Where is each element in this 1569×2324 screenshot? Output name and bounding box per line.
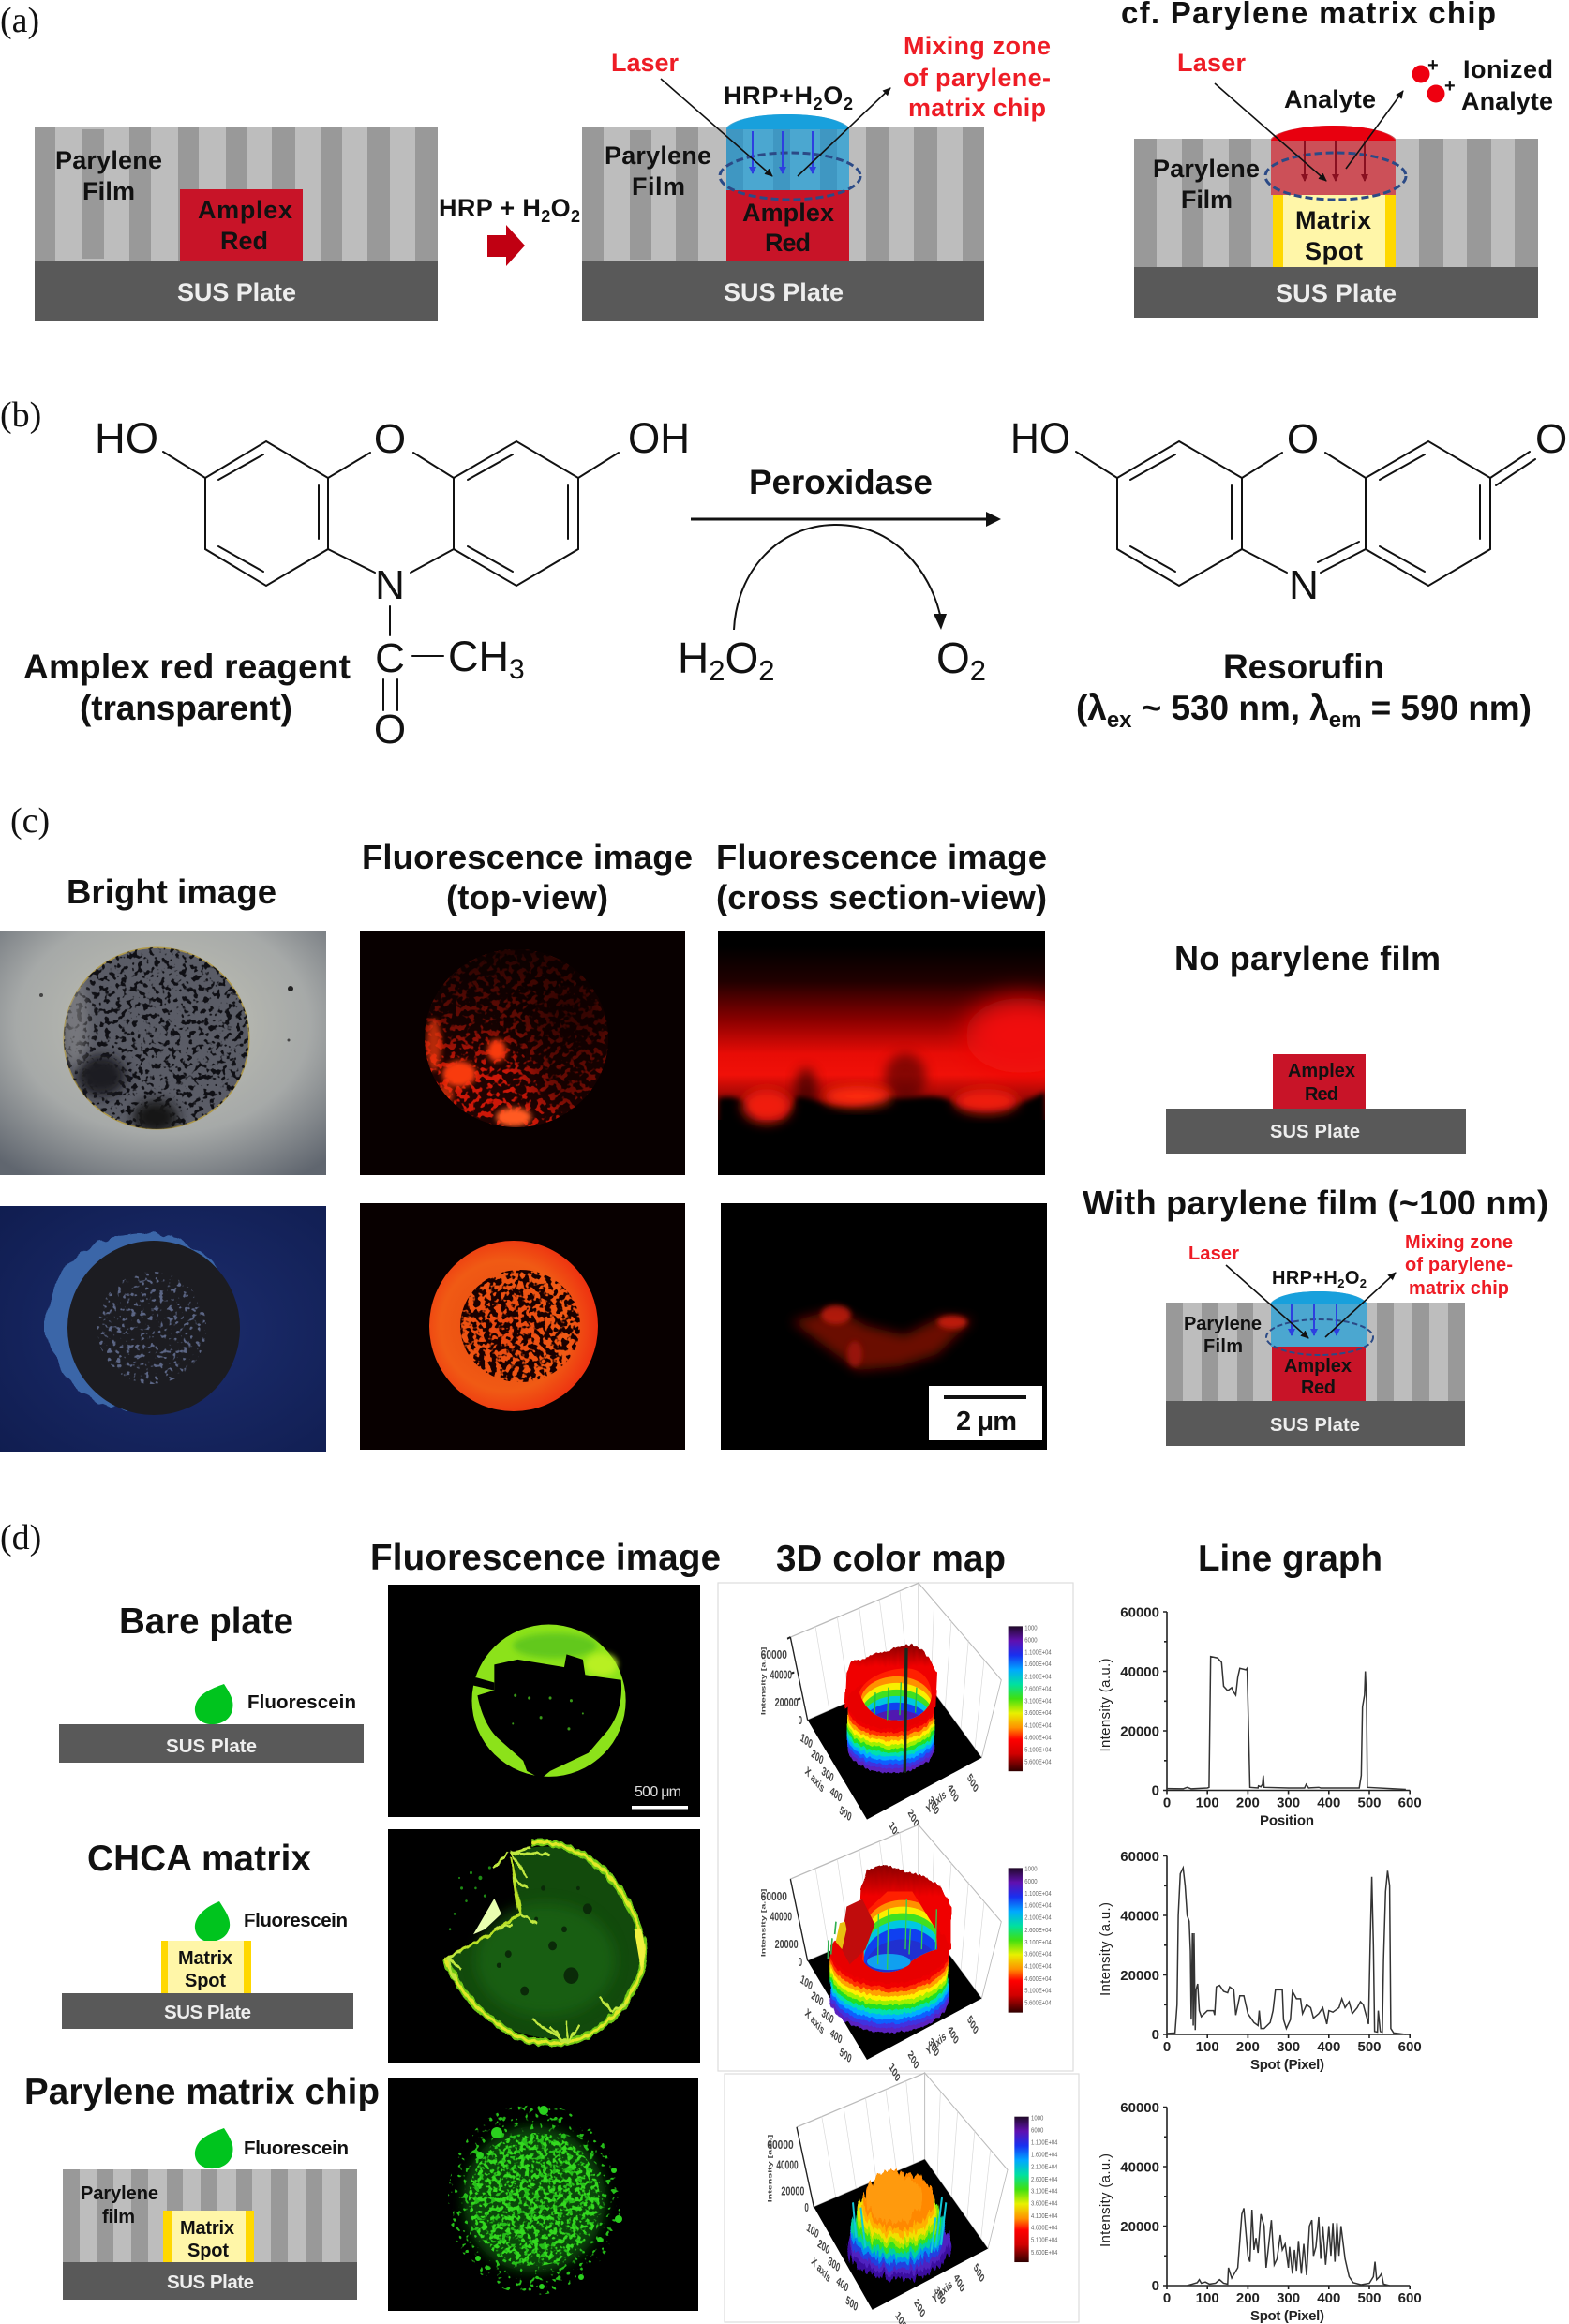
color bar: 6000: [1024, 1879, 1038, 1885]
chart: 3D color map, parylene matrix chip: 20000: [781, 2184, 804, 2198]
panel label (a): (a): [0, 1, 39, 40]
color bar: 1.600E+04: [1031, 2153, 1058, 2159]
chart: line graph, CHCA matrix: 300: [1277, 2039, 1300, 2055]
scale bar: 2 μm: [929, 1386, 1042, 1440]
chart: 3D color map, bare plate: 0: [799, 1714, 802, 1727]
chart: 3D color map, parylene matrix chip: 400: [952, 2272, 966, 2295]
arrow: peroxidase reaction: [678, 463, 1001, 687]
chart: 3D color map, parylene matrix chip: [766, 2073, 1058, 2324]
arrow: peroxidase reaction: O: [936, 633, 970, 682]
color bar: 5.600E+04: [1024, 2001, 1052, 2007]
photo: bright image, no film: [0, 931, 326, 1175]
photo: green fluorescence, parylene matrix chip: [388, 2078, 698, 2311]
heading: Fluorescence image top-view: [362, 838, 693, 916]
schematic: CHCA matrix spot: Matrix: [178, 1948, 232, 1969]
label mixing zone: matrix chip: [908, 94, 1046, 122]
schematic: parylene matrix chip: Fluorescein: [244, 2138, 349, 2159]
panel label (c): (c): [10, 801, 50, 841]
schematic: CHCA matrix spot: [62, 1901, 353, 2029]
arrow: peroxidase reaction: 2: [970, 654, 986, 687]
chart: 3D color map, CHCA matrix: 0: [799, 1956, 802, 1969]
chart: 3D color map, CHCA matrix: Intensity [a.u.]: [760, 1889, 767, 1957]
schematic: with parylene film: Mixing zone: [1405, 1232, 1513, 1253]
chart: 3D color map, parylene matrix chip: 300: [933, 2284, 947, 2308]
ionized analyte dots: +: [1444, 76, 1456, 97]
chart: line graph, CHCA matrix: 100: [1196, 2039, 1219, 2055]
label HRP+H2O2: O: [823, 82, 843, 110]
chart: 3D color map, parylene matrix chip: 60000: [767, 2138, 794, 2153]
schematic: with parylene film: Red: [1301, 1378, 1336, 1398]
chart: line graph, parylene matrix chip: 100: [1196, 2290, 1219, 2306]
schematic: bare plate with fluorescein drop: SUS Plate: [166, 1736, 257, 1757]
color bar: [1014, 2116, 1058, 2262]
chart: 3D color map, bare plate: 40000: [770, 1669, 792, 1682]
chart: 3D color map, CHCA matrix: 500: [838, 2046, 853, 2066]
parylene film label: [1153, 155, 1260, 214]
heading: Fluorescence image cross section-view: Fluorescence image: [716, 838, 1047, 876]
chart: line graph, parylene matrix chip: [1098, 2100, 1422, 2324]
color bar: 1000: [1031, 2116, 1043, 2123]
chart: line graph, bare plate: 20000: [1120, 1724, 1159, 1739]
analyte droplet: [1271, 126, 1396, 195]
parylene film label: Parylene: [605, 142, 711, 170]
panel (b): Amplex red molecule: [95, 414, 690, 752]
photo: green fluorescence, CHCA matrix: [388, 1829, 700, 2063]
chart: 3D color map, bare plate: 300: [926, 1794, 941, 1818]
chart: line graph, bare plate: 200: [1236, 1795, 1260, 1810]
photo: bright image, with film: [0, 1206, 326, 1452]
heading: Bare plate: Bare plate: [119, 1601, 293, 1642]
color bar: 4.100E+04: [1024, 1964, 1052, 1971]
chart: 3D color map, bare plate: 60000: [761, 1648, 787, 1662]
arrow: peroxidase reaction: 2: [758, 654, 775, 687]
icon: green drop: [195, 1684, 233, 1724]
color bar: 5.600E+04: [1024, 1760, 1052, 1766]
heading: Fluorescence image cross section-view: (cross section-view): [716, 878, 1047, 916]
photo: fluorescence cross-section, no film: [718, 931, 1078, 1175]
Amplex Red block: Amplex: [742, 199, 834, 227]
panel (b): Amplex red molecule: OH: [628, 414, 690, 462]
chart: 3D color map, bare plate: Y axis: [925, 1788, 948, 1817]
chart: 3D color map, CHCA matrix: 20000: [775, 1938, 799, 1952]
chart: 3D color map, parylene matrix chip: 200: [816, 2237, 831, 2257]
parylene film label: [55, 146, 162, 205]
label: Amplex red reagent: Amplex red reagent: [23, 648, 351, 686]
chart: line graph, bare plate: 300: [1277, 1795, 1300, 1810]
chart: 3D color map, CHCA matrix: 300: [926, 2035, 941, 2060]
chart: line graph, CHCA matrix: 600: [1398, 2039, 1422, 2055]
label: Amplex red reagent: [23, 648, 351, 727]
chart: 3D color map, bare plate: 400: [946, 1781, 960, 1806]
color bar: 4.600E+04: [1031, 2226, 1058, 2232]
color bar: 5.100E+04: [1024, 1989, 1052, 1995]
chart: 3D color map, parylene matrix chip: X axis: [810, 2255, 832, 2286]
parylene film label: Parylene: [1153, 155, 1260, 183]
scale bar: 2 μm: 2 μm: [956, 1407, 1017, 1437]
chart: 3D color map, parylene matrix chip: 40000: [776, 2159, 799, 2172]
panel (a): schematic 3, parylene matrix chip: [1134, 49, 1553, 318]
schematic: parylene matrix chip: SUS Plate: [167, 2272, 254, 2293]
chart: line graph, parylene matrix chip: 0: [1163, 2290, 1171, 2306]
parylene film label: Film: [82, 177, 135, 205]
label: Resorufin: (λ: [1076, 689, 1107, 727]
matrix spot: Matrix: [1295, 206, 1371, 234]
chart: 3D color map, bare plate: 300: [820, 1765, 835, 1785]
panel (b): Amplex red molecule: CH: [448, 633, 509, 680]
chart: line graph, parylene matrix chip: 40000: [1120, 2159, 1159, 2176]
chart: 3D color map, parylene matrix chip: Y axis: [931, 2278, 954, 2307]
schematic: with parylene film: Parylene: [1184, 1314, 1262, 1334]
chart: line graph, bare plate: 0: [1163, 1795, 1171, 1810]
chart: 3D color map, bare plate: 100: [888, 1819, 902, 1843]
chart: line graph, bare plate: [1098, 1604, 1422, 1829]
heading: Fluorescence image cross section-view: [716, 838, 1047, 916]
arrow: peroxidase reaction: H: [678, 633, 709, 682]
chart: 3D color map, parylene matrix chip: 200: [912, 2296, 927, 2320]
parylene film label: Parylene: [55, 146, 162, 174]
schematic: parylene matrix chip: [63, 2128, 357, 2300]
chart: line graph, bare plate: 100: [1196, 1795, 1219, 1810]
schematic: no parylene film: Red: [1305, 1084, 1338, 1105]
color bar: 2.600E+04: [1031, 2177, 1058, 2183]
chart: 3D color map, CHCA matrix: 400: [829, 2026, 844, 2048]
chart: 3D color map, bare plate: X axis: [803, 1765, 826, 1795]
schematic: no parylene film: SUS Plate: [1270, 1122, 1360, 1142]
panel (a): schematic 1, parylene film before reaction: [35, 127, 438, 321]
panel label (b): (b): [0, 395, 41, 435]
panel (b): Amplex red molecule: HO: [95, 414, 158, 462]
scale bar: 500 μm: 500 μm: [635, 1784, 681, 1800]
photo: fluorescence cross-section, with film: [721, 1203, 1047, 1450]
reagent label HRP + H2O2: HRP + H: [439, 194, 541, 222]
chart: 3D color map, parylene matrix chip: 100: [805, 2221, 820, 2242]
dark red downward arrows: [1305, 141, 1365, 181]
chart: 3D color map, parylene matrix chip: 500: [972, 2261, 986, 2286]
panel (b): Amplex red molecule: C: [375, 635, 405, 681]
parylene film label: Film: [1181, 186, 1233, 214]
chart: 3D color map, bare plate: Intensity [a.u.]: [760, 1647, 767, 1715]
schematic: with parylene film: of parylene-: [1405, 1255, 1513, 1275]
color bar: 1.100E+04: [1031, 2140, 1058, 2147]
heading: Fluorescence image top-view: Fluorescence image: [362, 838, 693, 876]
color bar: 4.600E+04: [1024, 1736, 1052, 1742]
schematic: bare plate with fluorescein drop: [59, 1684, 364, 1763]
chart: line graph, parylene matrix chip: 60000: [1120, 2100, 1159, 2116]
schematic: no parylene film: Amplex: [1288, 1061, 1355, 1081]
label: Amplex red reagent: (transparent): [80, 689, 292, 727]
label: Resorufin: = 590 nm): [1361, 689, 1532, 727]
arrow: peroxidase reaction: Peroxidase: [749, 463, 933, 501]
panel (b): Amplex red molecule: N: [375, 562, 405, 608]
label Analyte: Analyte: [1284, 85, 1376, 113]
color bar: 4.100E+04: [1024, 1723, 1052, 1730]
chart: 3D color map, parylene matrix chip: 500: [844, 2294, 859, 2315]
chart: line graph, bare plate: 0: [1152, 1782, 1159, 1799]
schematic: parylene matrix chip: film: [102, 2207, 135, 2227]
panel (b): Amplex red molecule: O: [374, 707, 406, 752]
chart: line graph, parylene matrix chip: 400: [1317, 2290, 1340, 2306]
schematic: with parylene film: SUS Plate: [1270, 1415, 1360, 1436]
panel (b): Resorufin molecule: O: [1287, 416, 1319, 462]
chart: line graph, CHCA matrix: Intensity (a.u.): [1098, 1902, 1113, 1996]
SUS plate: [1134, 267, 1538, 318]
matrix spot: Spot: [1305, 237, 1363, 265]
reagent label HRP + H2O2: 2: [541, 207, 550, 226]
heading: 3D color map: 3D color map: [776, 1539, 1006, 1579]
chart: 3D color map, CHCA matrix: 200: [810, 1989, 825, 2009]
blue downward arrows: [753, 131, 813, 173]
icon: green drop: [195, 1901, 230, 1942]
chart: line graph, CHCA matrix: 200: [1236, 2039, 1260, 2055]
panel (b): Resorufin molecule: O: [1535, 416, 1567, 462]
chart: 3D color map, CHCA matrix: 100: [888, 2061, 902, 2085]
chart: line graph, parylene matrix chip: 20000: [1120, 2219, 1159, 2235]
parylene film label: [605, 142, 711, 201]
chart: line graph, parylene matrix chip: 600: [1398, 2290, 1422, 2306]
chart: 3D color map, bare plate: 200: [906, 1807, 920, 1830]
arrow: laser in and out: [661, 79, 890, 176]
color bar: 1000: [1024, 1626, 1038, 1632]
icon: green drop: [195, 2128, 233, 2168]
label: Resorufin: [1076, 648, 1532, 733]
color bar: 4.600E+04: [1024, 1976, 1052, 1983]
schematic: with parylene film: [1166, 1232, 1513, 1446]
chart: line graph, parylene matrix chip: 0: [1152, 2278, 1159, 2294]
color bar: 5.100E+04: [1031, 2238, 1058, 2244]
label HRP+H2O2: HRP+H: [724, 82, 813, 110]
arrow: laser in and out: [1215, 83, 1403, 181]
SUS plate: [35, 261, 438, 321]
chart: line graph, CHCA matrix: 40000: [1120, 1908, 1159, 1925]
color bar: 1.600E+04: [1024, 1661, 1052, 1669]
Amplex Red block: Red: [765, 229, 811, 257]
heading: Line graph: Line graph: [1198, 1539, 1382, 1579]
chart: line graph, bare plate: Position: [1260, 1812, 1314, 1829]
heading: Fluorescence image: Fluorescence image: [370, 1538, 721, 1578]
chart: 3D color map, bare plate: 500: [838, 1804, 853, 1825]
chart: 3D color map, CHCA matrix: X axis: [803, 2006, 826, 2037]
chart: line graph, parylene matrix chip: 200: [1236, 2290, 1260, 2306]
heading: With parylene film: With parylene film (~100 nm): [1083, 1184, 1548, 1222]
schematic: with parylene film: HRP+H: [1272, 1268, 1337, 1289]
schematic: with parylene film: Laser: [1188, 1244, 1239, 1264]
color bar: [1009, 1867, 1052, 2013]
chart: 3D color map, parylene matrix chip: Intensity [a.u.]: [766, 2135, 773, 2202]
schematic: parylene matrix chip: Parylene: [81, 2183, 158, 2204]
chart: line graph, parylene matrix chip: 300: [1277, 2290, 1300, 2306]
chart: line graph, parylene matrix chip: Intensity (a.u.): [1098, 2153, 1113, 2247]
schematic: with parylene film: 2: [1360, 1276, 1367, 1290]
label: Resorufin: em: [1329, 708, 1361, 733]
color bar: 6000: [1031, 2127, 1043, 2135]
color bar: 4.100E+04: [1031, 2213, 1058, 2220]
matrix spot: [1273, 195, 1396, 267]
schematic: CHCA matrix spot: Fluorescein: [244, 1910, 348, 1931]
schematic: with parylene film: Film: [1203, 1336, 1243, 1357]
schematic: CHCA matrix spot: Spot: [185, 1971, 226, 1991]
ionized analyte dots: +: [1427, 55, 1439, 76]
photo: fluorescence top-view, with film: [360, 1203, 685, 1450]
SUS plate: SUS Plate: [724, 278, 844, 306]
panel (b): Resorufin molecule: HO: [1010, 414, 1070, 462]
color bar: 3.600E+04: [1031, 2201, 1058, 2208]
chart: 3D color map, CHCA matrix: 200: [906, 2048, 920, 2072]
Amplex Red block: [180, 189, 303, 261]
chart: line graph, CHCA matrix: Spot (Pixel): [1250, 2057, 1324, 2073]
chart: line graph, CHCA matrix: 60000: [1120, 1849, 1159, 1865]
label: Resorufin: Resorufin: [1223, 648, 1384, 686]
color bar: 2.100E+04: [1024, 1675, 1052, 1681]
chart: 3D color map, parylene matrix chip: 0: [804, 2201, 809, 2215]
arrow: peroxidase reaction: O: [725, 633, 758, 682]
ionized analyte dots: [1412, 55, 1456, 103]
label mixing zone: Mixing zone: [904, 32, 1051, 60]
color bar: 2.600E+04: [1024, 1687, 1052, 1693]
color bar: 2.600E+04: [1024, 1928, 1052, 1934]
color bar: 3.100E+04: [1024, 1699, 1052, 1706]
label Laser: Laser: [611, 49, 679, 77]
chart: 3D color map, CHCA matrix: Y axis: [925, 2030, 948, 2059]
schematic: parylene matrix chip: Spot: [187, 2241, 229, 2261]
chart: 3D color map, CHCA matrix: 500: [965, 2013, 979, 2037]
color bar: 3.600E+04: [1024, 1952, 1052, 1959]
schematic: bare plate with fluorescein drop: Fluorescein: [247, 1691, 356, 1713]
reagent label HRP + H2O2: O: [551, 194, 571, 222]
chart: 3D color map, parylene matrix chip: 400: [835, 2274, 850, 2295]
color bar: 3.100E+04: [1024, 1940, 1052, 1946]
panel (b): Amplex red molecule: 3: [509, 654, 525, 685]
chart: line graph, CHCA matrix: 500: [1357, 2039, 1382, 2055]
label mixing zone: of parylene-: [904, 64, 1051, 92]
color bar: 3.100E+04: [1031, 2189, 1058, 2196]
chart: 3D color map, CHCA matrix: [760, 1825, 1052, 2085]
droplet HRP+H2O2: [726, 114, 849, 190]
chart: line graph, CHCA matrix: 0: [1163, 2039, 1171, 2055]
chart: line graph, CHCA matrix: 0: [1152, 2027, 1159, 2043]
color bar: 1.600E+04: [1024, 1903, 1052, 1910]
panel (b): Amplex red molecule: O: [374, 416, 406, 462]
label HRP+H2O2: 2: [844, 95, 853, 113]
label Ionized Analyte: [1461, 55, 1553, 115]
schematic: with parylene film: O: [1345, 1268, 1359, 1289]
color bar: 1.100E+04: [1024, 1650, 1052, 1657]
chart: 3D color map, bare plate: 500: [965, 1771, 979, 1795]
chart: 3D color map, bare plate: 100: [799, 1731, 814, 1751]
heading: Parylene matrix chip: Parylene matrix chip: [24, 2072, 380, 2112]
mixing zone ellipse: [720, 153, 860, 200]
photo: green fluorescence, bare plate: [388, 1585, 700, 1817]
chart: line graph, bare plate: 60000: [1120, 1604, 1159, 1621]
label mixing zone: [904, 32, 1051, 122]
label HRP+H2O2: 2: [814, 95, 823, 113]
color bar: 2.100E+04: [1031, 2165, 1058, 2171]
parylene film label: Film: [632, 172, 685, 201]
chart: 3D color map, CHCA matrix: 60000: [761, 1890, 787, 1904]
chart: line graph, bare plate: 400: [1317, 1795, 1340, 1810]
chart: line graph, bare plate: Intensity (a.u.): [1098, 1659, 1113, 1752]
label: Resorufin: ex: [1107, 708, 1132, 733]
reagent label HRP + H2O2: 2: [571, 207, 580, 226]
chart: line graph, CHCA matrix: 20000: [1120, 1968, 1159, 1984]
photo: fluorescence top-view, no film: [360, 931, 685, 1175]
panel label (d): (d): [0, 1518, 41, 1557]
Amplex Red block: Amplex: [198, 196, 292, 224]
color bar: 1000: [1024, 1867, 1038, 1873]
chart: 3D color map, bare plate: 20000: [775, 1696, 799, 1710]
heading: No parylene film: No parylene film: [1174, 939, 1441, 977]
schematic: parylene matrix chip: Matrix: [180, 2218, 234, 2239]
Amplex Red block: [726, 190, 849, 261]
chart: line graph, parylene matrix chip: 500: [1357, 2290, 1382, 2306]
heading: Fluorescence image top-view: (top-view): [446, 878, 608, 916]
color bar: 5.600E+04: [1031, 2250, 1058, 2257]
chart: line graph, CHCA matrix: 400: [1317, 2039, 1340, 2055]
schematic: CHCA matrix spot: SUS Plate: [164, 2002, 251, 2023]
schematic: with parylene film: Amplex: [1284, 1356, 1352, 1377]
color bar: 5.100E+04: [1024, 1747, 1052, 1754]
chart: 3D color map, CHCA matrix: 100: [799, 1973, 814, 1993]
Amplex Red block: Red: [220, 227, 268, 255]
panel (b): Resorufin molecule: [1010, 414, 1567, 608]
label Ionized Analyte: Analyte: [1461, 87, 1553, 115]
chart: line graph, CHCA matrix: [1098, 1849, 1422, 2073]
schematic: no parylene film: [1166, 1054, 1466, 1154]
color bar: 2.100E+04: [1024, 1915, 1052, 1922]
chart: line graph, bare plate: 500: [1357, 1795, 1382, 1810]
3D color map frames: [718, 1583, 1079, 2322]
color bar: 1.100E+04: [1024, 1891, 1052, 1898]
label: Resorufin: ~ 530 nm, λ: [1131, 689, 1329, 727]
arrow: peroxidase reaction: 2: [709, 654, 725, 687]
panel (b): Resorufin molecule: N: [1289, 562, 1319, 608]
heading: Bright image: Bright image: [67, 872, 276, 911]
scale bar: 500 μm: [632, 1784, 688, 1809]
chart: 3D color map, CHCA matrix: 400: [946, 2023, 960, 2048]
schematic: with parylene film: 2: [1337, 1276, 1344, 1290]
panel (a): schematic 2, mixing zone of parylene-matrix chip: [582, 32, 1051, 321]
label Laser: Laser: [1177, 49, 1246, 77]
chart: 3D color map, bare plate: 400: [829, 1784, 844, 1806]
chart: line graph, parylene matrix chip: Spot (Pixel): [1250, 2308, 1324, 2324]
chart: 3D color map, bare plate: 200: [810, 1747, 825, 1767]
SUS plate: [582, 261, 984, 321]
chart: 3D color map, CHCA matrix: 300: [820, 2006, 835, 2027]
chart: line graph, bare plate: 600: [1398, 1795, 1422, 1810]
schematic: with parylene film: matrix chip: [1409, 1278, 1509, 1299]
label Ionized Analyte: Ionized: [1463, 55, 1553, 83]
chart: 3D color map, parylene matrix chip: 300: [827, 2255, 842, 2275]
color bar: 6000: [1024, 1638, 1038, 1645]
SUS plate: SUS Plate: [177, 278, 296, 306]
chart: line graph, bare plate: 40000: [1120, 1664, 1159, 1680]
heading: CHCA matrix: CHCA matrix: [87, 1839, 312, 1879]
arrow: red block arrow: [487, 225, 525, 266]
SUS plate: SUS Plate: [1276, 279, 1397, 307]
color bar: 3.600E+04: [1024, 1710, 1052, 1718]
mixing zone ellipse: [1265, 153, 1406, 200]
chart: 3D color map, bare plate: [760, 1583, 1052, 1843]
chart: 3D color map, CHCA matrix: 40000: [770, 1911, 792, 1924]
color bar: [1009, 1626, 1052, 1771]
